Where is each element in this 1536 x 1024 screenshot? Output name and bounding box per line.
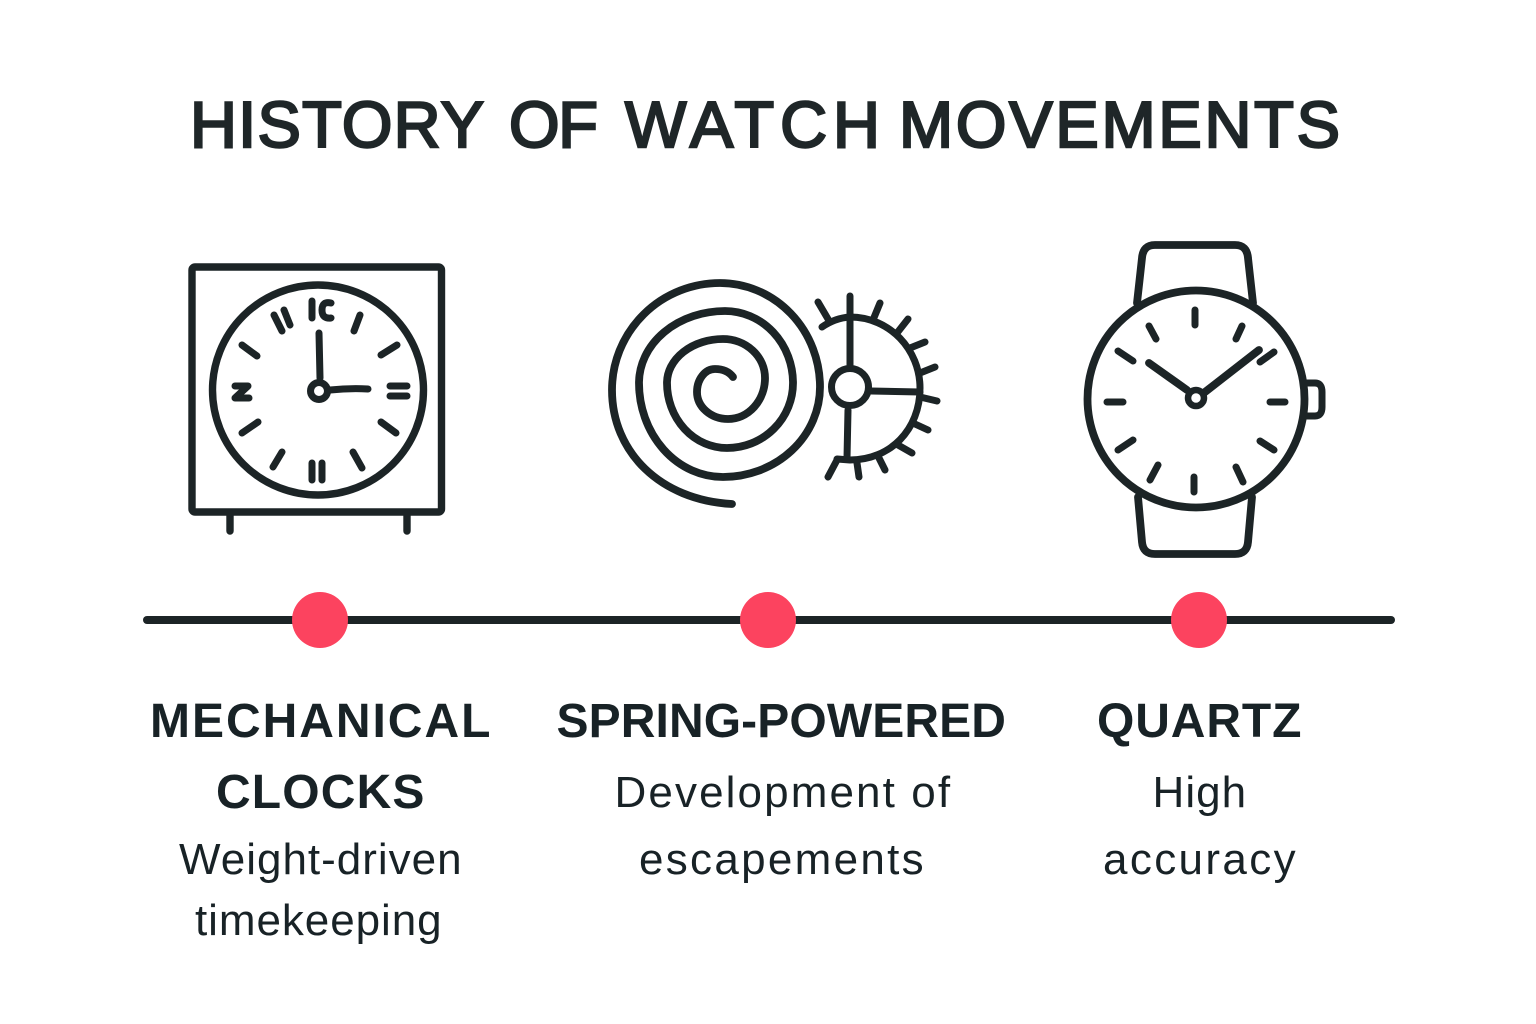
text block: mechanical clocks: timekeeping (195, 896, 443, 945)
text block: quartz (1097, 695, 1303, 884)
text block: mechanical clocks: CLOCKS (216, 766, 426, 819)
timeline line (147, 616, 1391, 624)
text block: quartz: High (1152, 768, 1248, 817)
title: HISTORY (190, 88, 484, 161)
text block: mechanical clocks: Weight-driven (179, 835, 463, 884)
text block: spring-powered: SPRING-POWERED (556, 695, 1008, 748)
text block: quartz: QUARTZ (1097, 695, 1303, 748)
text block: quartz: accuracy (1103, 835, 1297, 884)
icon: mechanical clock (192, 267, 442, 531)
title: OF (509, 88, 598, 161)
text block: spring-powered (556, 695, 1008, 884)
icon: quartz wristwatch (1088, 245, 1322, 554)
timeline marker: mechanical clocks (292, 592, 348, 648)
title: WATCH (625, 88, 880, 161)
text block: mechanical clocks: MECHANICAL (150, 695, 492, 748)
timeline marker: quartz (1171, 592, 1227, 648)
icon: spring and escapement (612, 283, 937, 504)
timeline marker: spring-powered (740, 592, 796, 648)
title: MOVEMENTS (899, 88, 1340, 161)
text block: spring-powered: escapements (639, 835, 925, 884)
title (190, 88, 1340, 161)
text block: spring-powered: Development of (614, 768, 952, 817)
text block: mechanical clocks (150, 695, 492, 945)
